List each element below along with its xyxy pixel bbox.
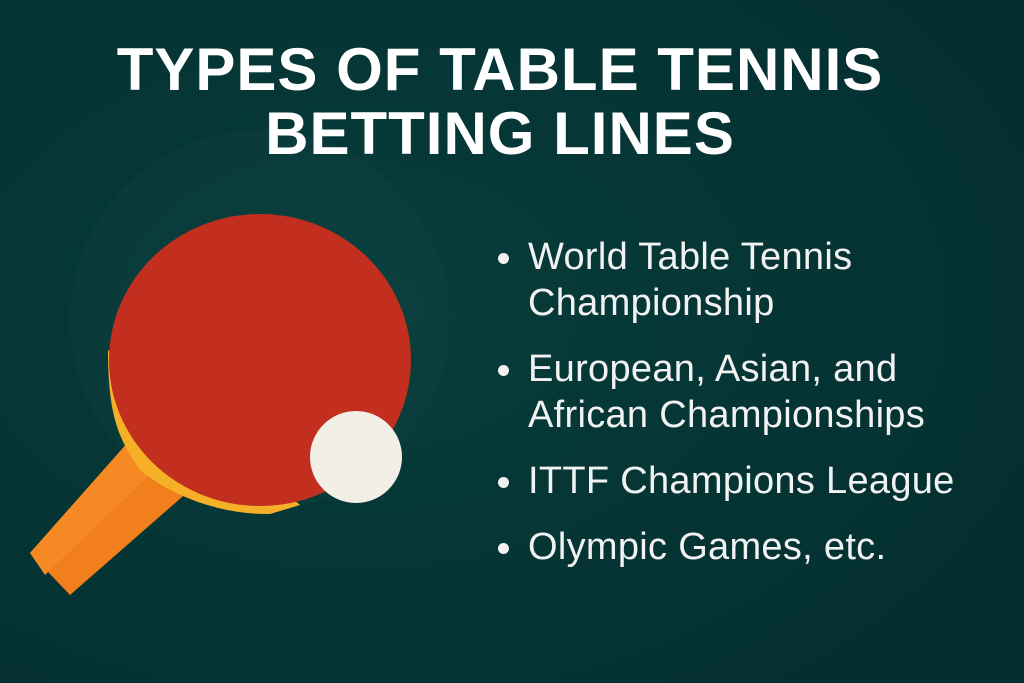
item 3: ITTF Champions League [528,460,955,502]
item 1 [494,234,955,326]
bullet list [498,236,955,568]
title: TYPES OF TABLE TENNIS [117,36,883,103]
item 2: African Championships [528,394,925,436]
item 2 [494,346,955,438]
paddle edge [108,350,300,514]
paddle handle [30,440,190,595]
title: BETTING LINES [265,100,735,167]
paddle head [109,214,411,506]
title [117,36,883,167]
ball [310,411,402,503]
item 1: Championship [528,282,775,324]
item 2: European, Asian, and [528,348,897,390]
item 1: World Table Tennis [528,236,852,278]
item 4: Olympic Games, etc. [528,526,886,568]
